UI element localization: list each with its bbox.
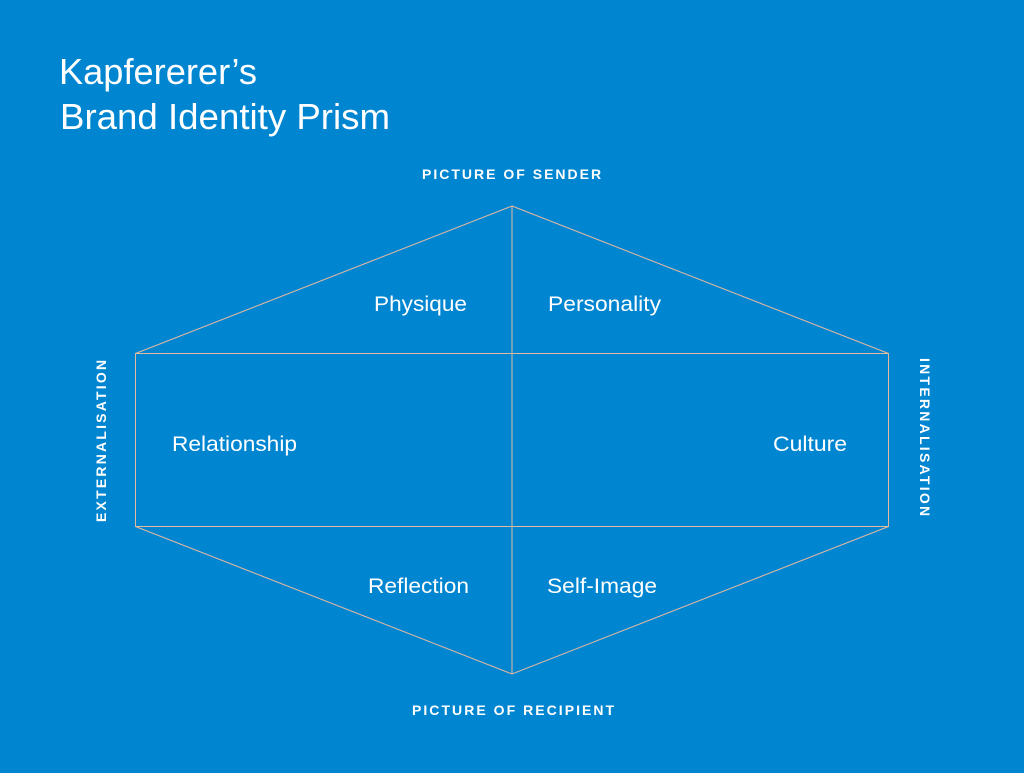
- prism inner lines: [136, 206, 888, 674]
- caption: externalisation: EXTERNALISATION: [93, 358, 109, 522]
- label: personality: Personality: [548, 292, 661, 316]
- label: reflection: Reflection: [368, 574, 469, 598]
- label: relationship: Relationship: [172, 432, 297, 456]
- title: [59, 51, 390, 137]
- caption: internalisation: INTERNALISATION: [917, 358, 933, 518]
- label: culture: Culture: [773, 432, 847, 456]
- title: Kapfererer’s: [59, 51, 257, 92]
- label: self-image: Self-Image: [547, 574, 657, 598]
- title: Brand Identity Prism: [60, 96, 390, 137]
- caption: picture of recipient: PICTURE OF RECIPIENT: [412, 702, 616, 718]
- caption: picture of sender: PICTURE OF SENDER: [422, 166, 603, 182]
- prism diagram: [136, 206, 888, 674]
- prism outline: [136, 206, 888, 674]
- label: physique: Physique: [374, 292, 467, 316]
